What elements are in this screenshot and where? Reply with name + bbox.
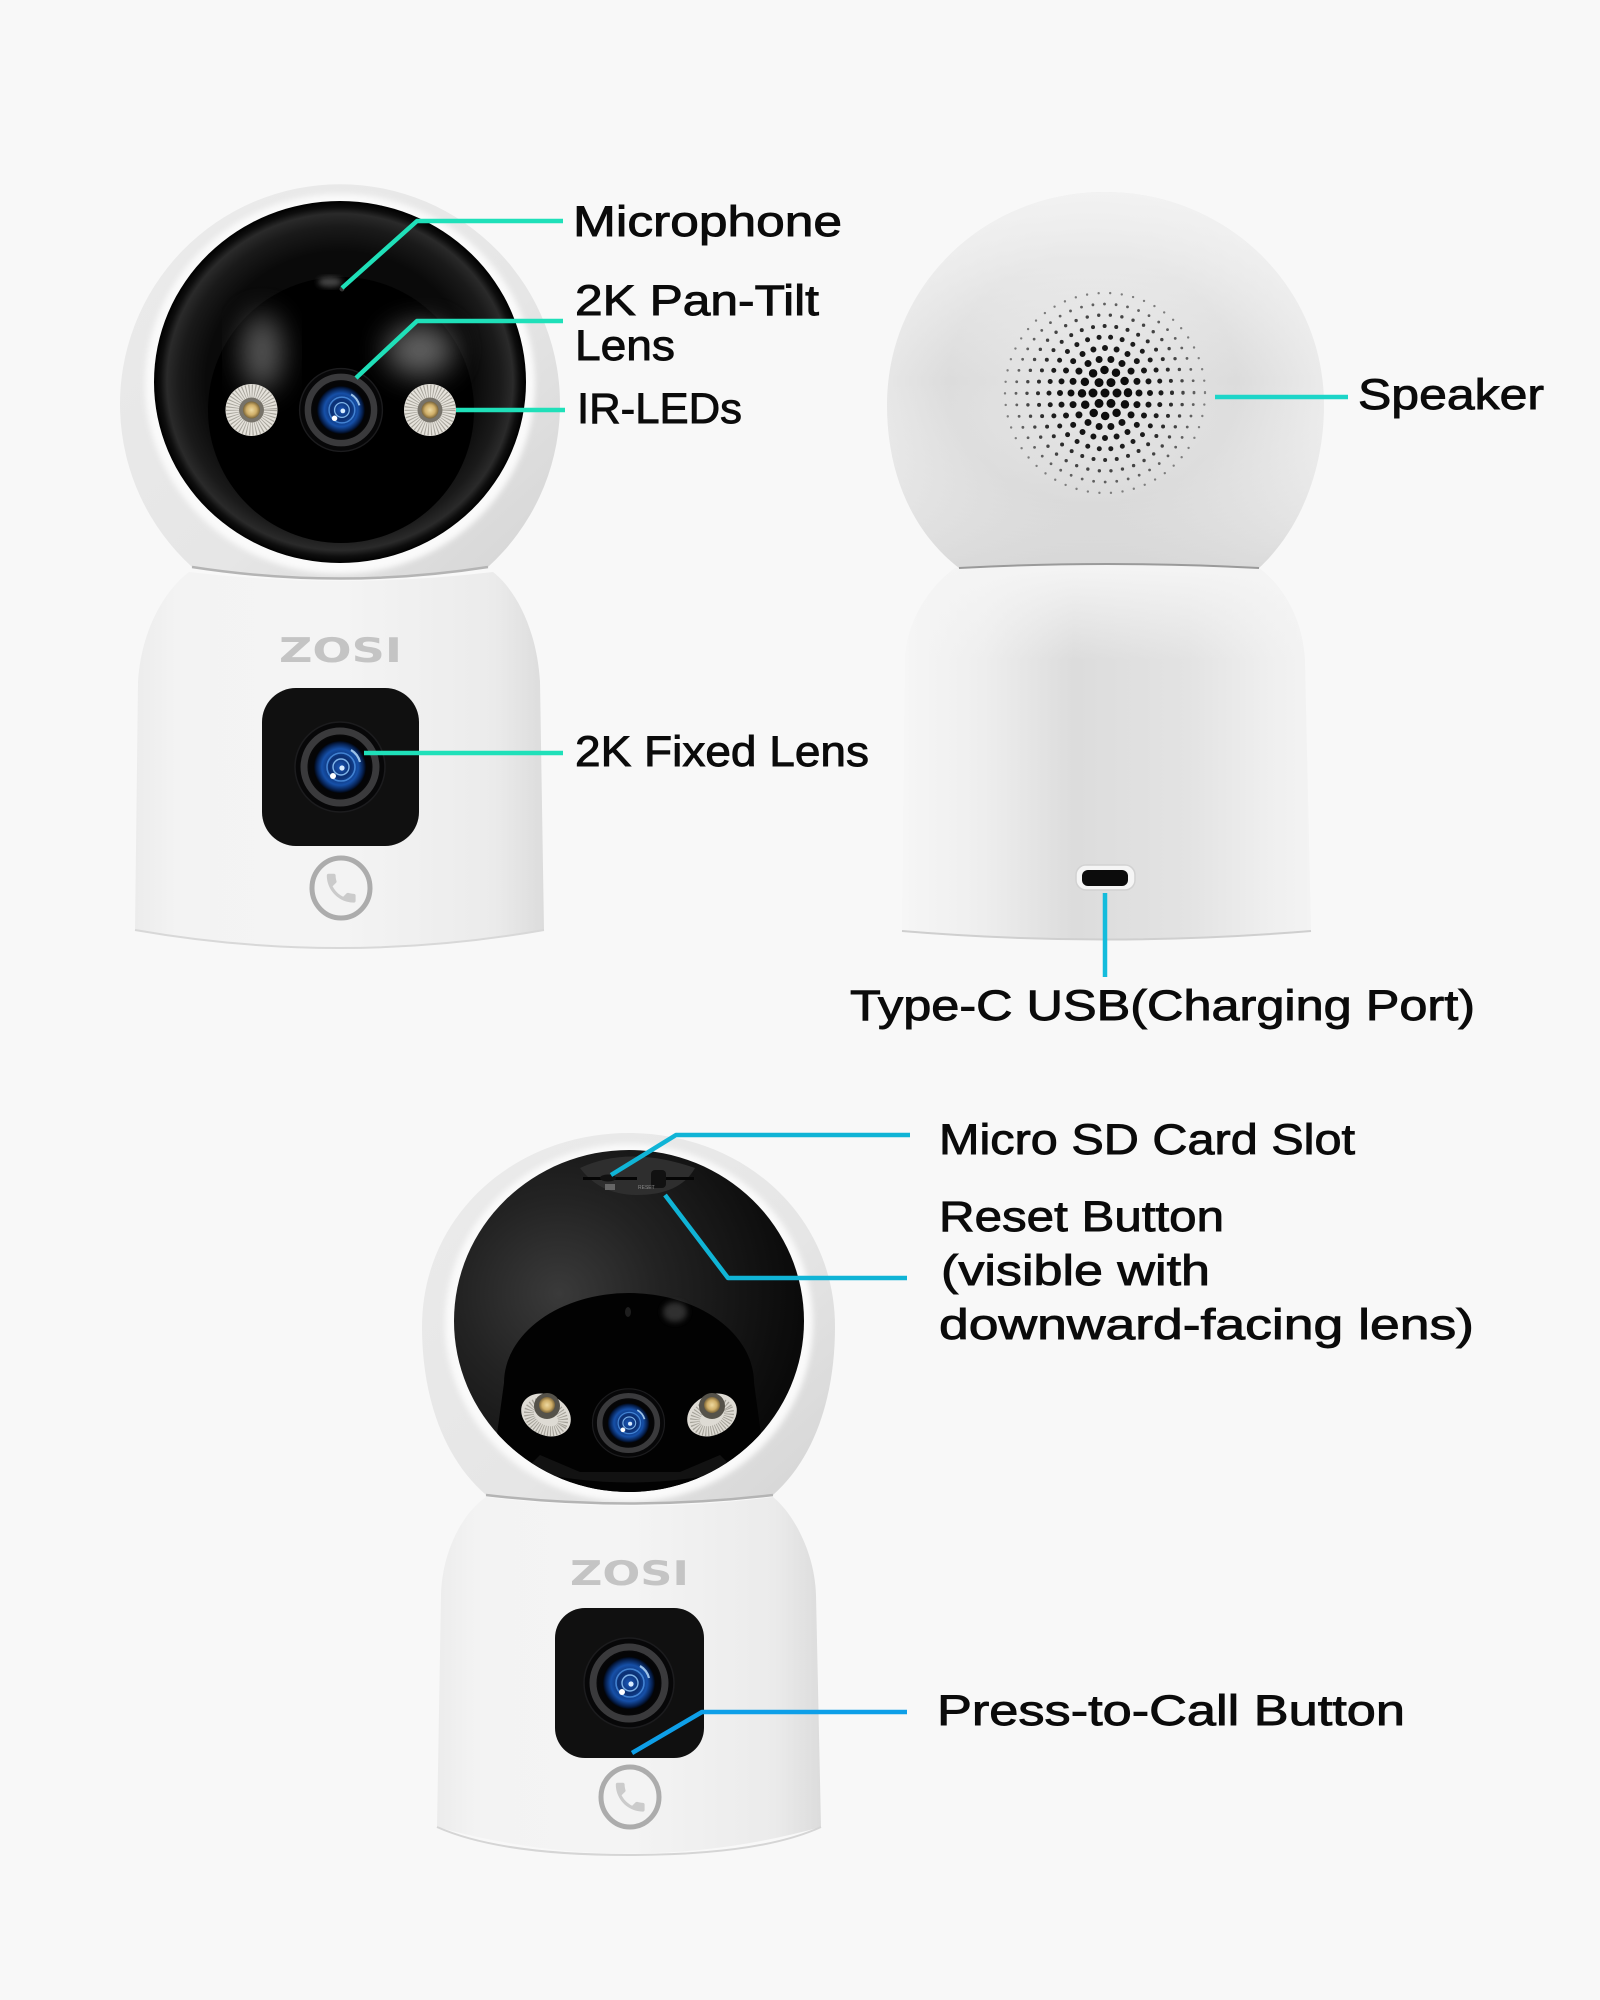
label: speaker: Speaker [1358, 371, 1544, 419]
camera head shell [120, 184, 560, 579]
fixed lens [584, 1638, 674, 1728]
callout line: USB port [1103, 893, 1107, 977]
pan-tilt lens [592, 1389, 664, 1457]
callout line: call button [632, 1712, 907, 1753]
speaker grille [1005, 293, 1205, 493]
fixed lens [295, 722, 385, 812]
base [437, 1497, 821, 1854]
callout line: reset button [665, 1195, 907, 1278]
IR LED right [404, 384, 456, 436]
back camera base [902, 564, 1311, 940]
black dome [454, 1150, 804, 1492]
ZOSI logo: ZOSI [279, 631, 402, 671]
SD and reset panel: RESET [638, 1185, 655, 1191]
USB-C port [1076, 865, 1135, 890]
label: pan-tilt lens: 2K Pan-Tilt [575, 277, 819, 325]
callout line: IR LEDs [456, 408, 565, 412]
inner lens housing [208, 277, 474, 543]
fixed lens panel [555, 1608, 704, 1758]
black lens dome [154, 201, 526, 563]
callout line: microphone [342, 221, 563, 288]
label: reset button: (visible with [941, 1247, 1210, 1295]
IR LED left [514, 1385, 578, 1445]
call button [601, 1767, 659, 1827]
IR LED left [226, 384, 278, 436]
label: reset button: downward-facing lens) [939, 1301, 1474, 1349]
call button [312, 858, 370, 918]
label: USB port: Type-C USB(Charging Port) [850, 982, 1475, 1030]
label: reset button: Reset Button [939, 1193, 1224, 1241]
front camera [120, 184, 560, 948]
back camera head [887, 192, 1324, 568]
camera base [135, 572, 544, 948]
callout line: micro SD [611, 1135, 910, 1175]
callout line: pan-tilt lens [356, 321, 563, 378]
label: call button: Press-to-Call Button [937, 1687, 1405, 1735]
label: IR LEDs: IR-LEDs [577, 385, 742, 433]
back camera [887, 192, 1324, 940]
IR LED right [680, 1385, 744, 1445]
SD and reset panel [580, 1156, 695, 1195]
ZOSI logo: ZOSI [570, 1554, 689, 1594]
fixed lens panel [262, 688, 419, 846]
downward-facing camera [422, 1133, 835, 1855]
lens housing [497, 1293, 761, 1492]
head shell [422, 1133, 835, 1504]
callout line: fixed lens [364, 751, 563, 755]
label: micro SD: Micro SD Card Slot [939, 1116, 1355, 1164]
label: lens: Lens [575, 322, 675, 370]
label: reset button [939, 1193, 1474, 1349]
label: fixed lens: 2K Fixed Lens [575, 728, 869, 776]
pan-tilt lens [300, 369, 382, 451]
label: microphone: Microphone [573, 198, 842, 246]
callout line: speaker [1215, 395, 1348, 399]
